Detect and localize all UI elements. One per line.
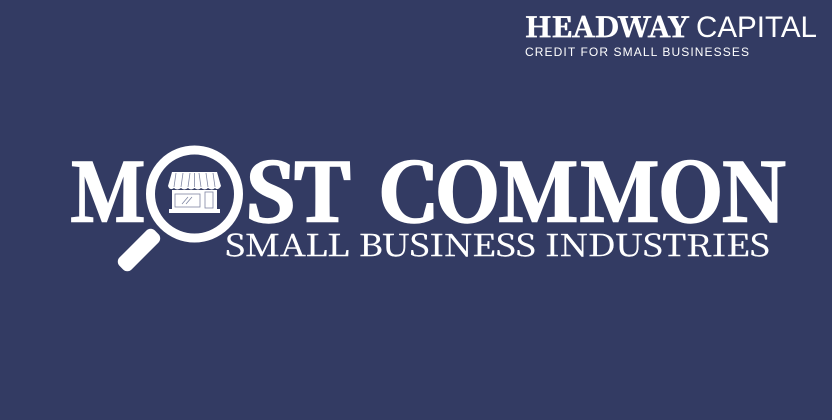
title: Most Common — [70, 130, 787, 244]
logo: Headway Capital: CREDIT FOR SMALL BUSINESSES — [525, 45, 749, 59]
icon: magnifying glass with store — [115, 150, 238, 274]
logo: Headway Capital — [525, 6, 817, 59]
logo: Headway Capital: CAPITAL — [696, 11, 817, 44]
title: Most Common: M — [70, 130, 146, 244]
subtitle: SMALL BUSINESS INDUSTRIES — [225, 221, 770, 265]
title: Most Common: ST — [246, 130, 351, 244]
icon: store — [168, 172, 221, 213]
logo: Headway Capital: HEADWAY — [525, 6, 689, 46]
title: Most Common: COMMON — [379, 130, 787, 244]
